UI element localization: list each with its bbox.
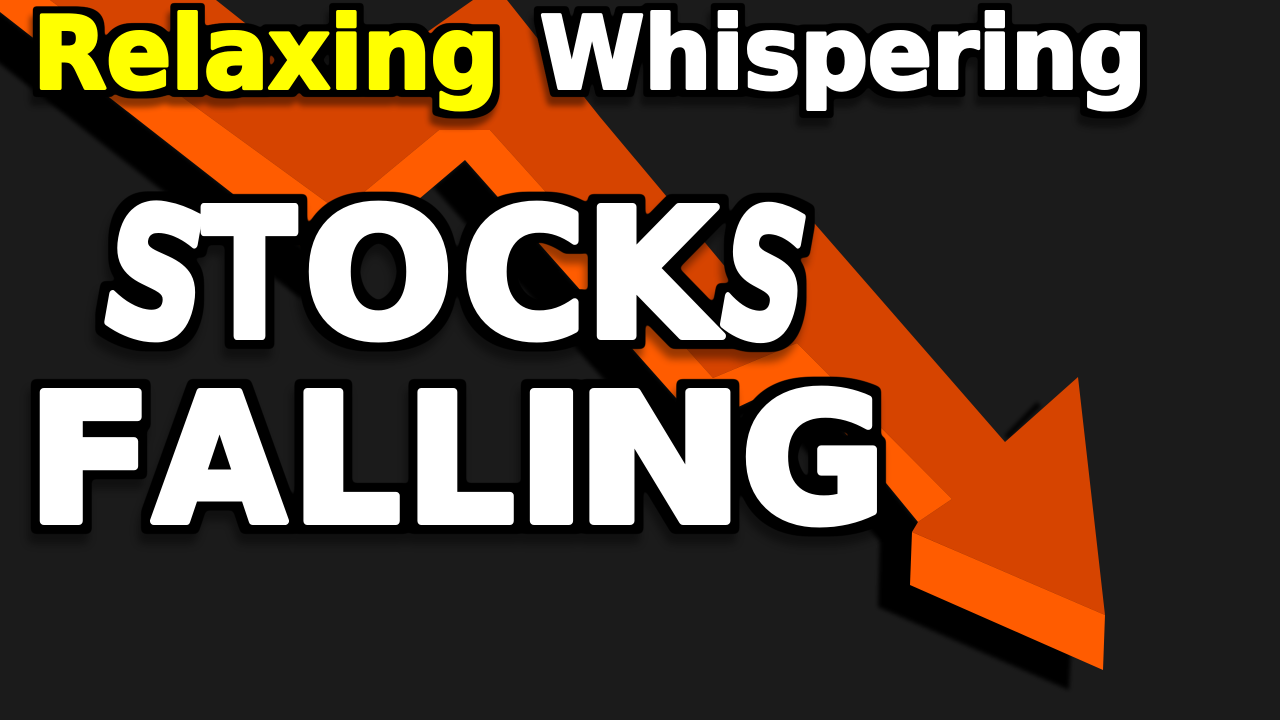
title word: STOCKS: O: [304, 172, 453, 378]
title word: STOCKS: C: [462, 172, 586, 378]
title word: FALLING: N: [575, 357, 744, 563]
title word: STOCKS: K: [585, 172, 723, 378]
title word: FALLING: [27, 357, 886, 563]
title word: STOCKS: T: [203, 172, 296, 378]
title word: FALLING: L: [406, 357, 515, 563]
title word: STOCKS: S: [88, 165, 223, 385]
title word: STOCKS: [88, 165, 824, 385]
title word: FALLING: G: [741, 357, 886, 563]
title word: FALLING: I: [517, 357, 586, 563]
title word: FALLING: L: [292, 357, 401, 563]
title word: FALLING: F: [27, 357, 153, 563]
title word: STOCKS: S: [705, 167, 824, 385]
arrow top face: dark orange: [50, 0, 1105, 615]
title word: FALLING: A: [153, 357, 286, 563]
arrow drop shadow: [0, 12, 1071, 690]
